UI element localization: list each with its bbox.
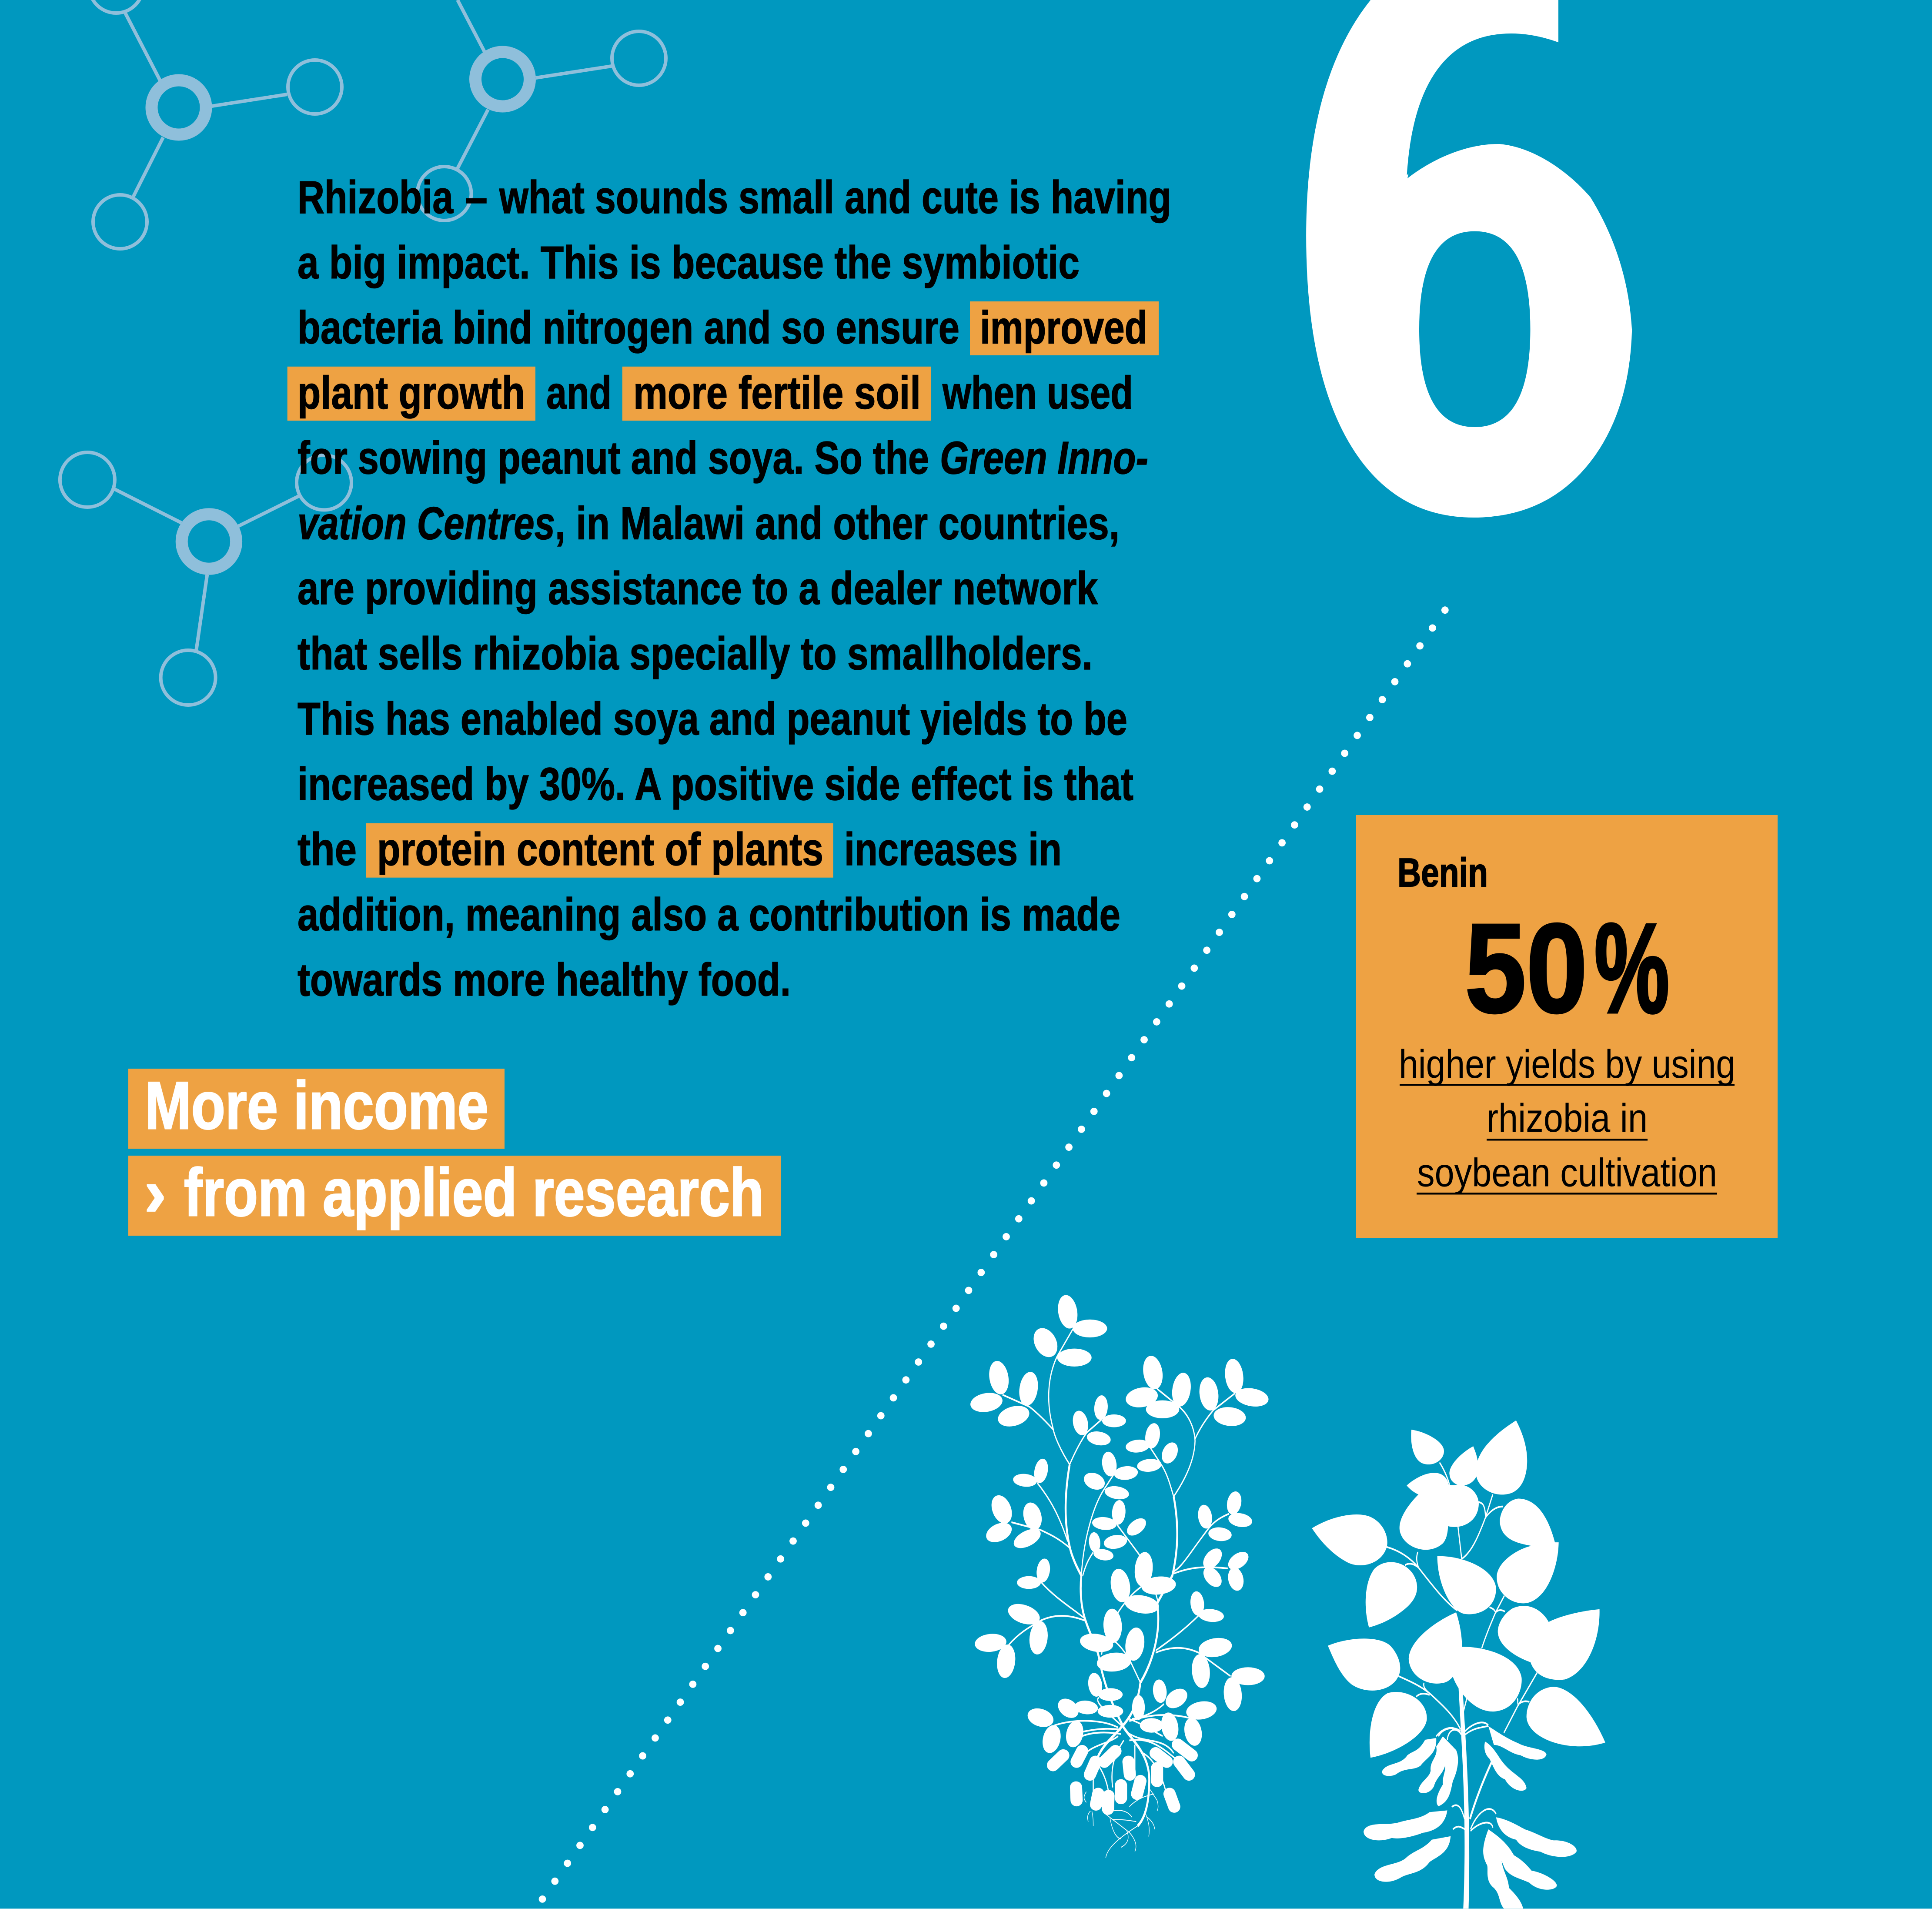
callout panel <box>1356 815 1778 1238</box>
line 4 and: and <box>546 367 612 418</box>
line 3 highlighted word: improved <box>980 302 1147 353</box>
line 10: increased by 30%. A positive side effect is that <box>297 759 1133 810</box>
callout underlines <box>1400 1084 1735 1194</box>
soybean main stem <box>1458 1685 1469 1909</box>
icon: peanut plant <box>970 1290 1269 1858</box>
heading: from applied research: › <box>144 1155 166 1230</box>
line 5 italic: Green Inno- <box>940 432 1148 484</box>
line 6: , in Malawi and other countries, <box>555 498 1120 549</box>
highlight: plant growth <box>287 367 535 421</box>
molecule: top centre <box>418 0 666 221</box>
peanut leaves <box>970 1290 1269 1759</box>
line 2: a big impact. This is because the symbiotic <box>297 237 1080 288</box>
line 13: towards more healthy food. <box>297 954 791 1006</box>
body text block <box>287 172 1171 1006</box>
heading: More income: More income <box>145 1068 488 1143</box>
line 1 rest: what sounds small and cute is having <box>499 172 1171 223</box>
line 11 the: the <box>297 824 357 875</box>
peanut pods <box>1053 1745 1192 1809</box>
line 6 italic: vation Centres <box>297 498 555 549</box>
molecule: middle left <box>60 452 351 705</box>
icon: soybean plant <box>1312 1421 1605 1909</box>
line 11 increases in: increases in <box>844 824 1062 875</box>
callout: Benin <box>1356 815 1778 1238</box>
heading: from applied research: from applied research <box>184 1155 764 1230</box>
line 7: are providing assistance to a dealer network <box>297 563 1098 614</box>
line 11 protein content of plants: protein content of plants <box>377 824 823 875</box>
line 1 dash: – <box>465 172 488 223</box>
callout percent sign: % <box>1594 897 1669 1039</box>
callout figure: 50 <box>1465 897 1588 1039</box>
line 4 plant growth: plant growth <box>297 367 525 418</box>
highlight: more fertile soil <box>622 367 931 421</box>
line 5: for sowing peanut and soya. So the <box>297 432 929 484</box>
line 3: bacteria bind nitrogen and so ensure <box>297 302 959 353</box>
soybean leaves <box>1312 1421 1605 1758</box>
callout line 1: higher yields by using <box>1399 1042 1735 1086</box>
dotted diagonal line <box>542 610 1445 1899</box>
soybean pods <box>1364 1726 1577 1909</box>
line 4 more fertile soil: more fertile soil <box>633 367 921 418</box>
highlight: improved <box>970 301 1159 355</box>
peanut stems <box>1003 1329 1235 1858</box>
callout country: Benin <box>1397 850 1488 895</box>
line 9: This has enabled soya and peanut yields to be <box>297 693 1127 745</box>
highlight: protein content of plants <box>366 823 833 878</box>
soybean stems <box>1386 1462 1537 1831</box>
line 1 Rhizobia: Rhizobia <box>297 172 454 223</box>
callout line 2: rhizobia in <box>1487 1096 1648 1140</box>
line 8: that sells rhizobia specially to smallholders. <box>297 628 1093 679</box>
line 4 when used: when used <box>942 367 1133 418</box>
callout line 3: soybean cultivation <box>1417 1151 1717 1195</box>
molecule: top left <box>89 0 342 249</box>
line 12: addition, meaning also a contribution is made <box>297 889 1120 940</box>
